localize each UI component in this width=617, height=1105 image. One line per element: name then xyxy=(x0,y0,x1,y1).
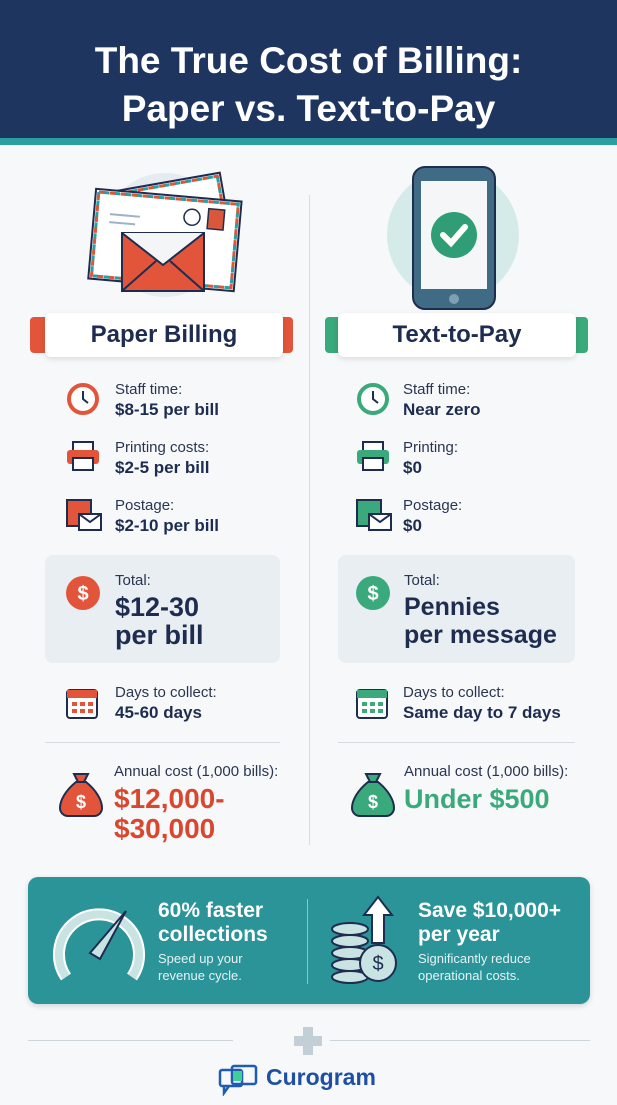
label: Text-to-Pay xyxy=(325,313,588,360)
title: The True Cost of Billing: xyxy=(95,40,522,81)
days right: Same day to 7 days xyxy=(403,703,561,722)
icon: money bag green xyxy=(351,773,395,817)
right rows: Printing: xyxy=(403,439,458,456)
logo: Curogram xyxy=(218,1064,376,1096)
icon: phone xyxy=(387,166,519,310)
icon: envelopes xyxy=(87,172,243,297)
text: save: operational costs. xyxy=(418,968,520,983)
header xyxy=(0,0,617,145)
days left xyxy=(66,684,217,722)
left rows: Printing costs: xyxy=(115,439,209,456)
total box right: Total: xyxy=(404,572,440,589)
label: Text-to-Pay: Text-to-Pay xyxy=(393,321,521,348)
annual left: $30,000 xyxy=(114,813,215,844)
icon: coins: $ xyxy=(372,953,384,975)
icon: dollar red: $ xyxy=(77,583,89,605)
left rows xyxy=(66,381,219,535)
total box left xyxy=(45,555,280,663)
icon: printer red xyxy=(67,441,99,471)
icon: speedometer xyxy=(52,908,146,980)
logo: Curogram: Curogram xyxy=(266,1064,376,1090)
left rows: $2-10 per bill xyxy=(115,516,219,535)
icon: coins xyxy=(331,896,397,984)
title xyxy=(95,40,522,129)
total box left: $12-30 xyxy=(115,592,199,622)
left rows: Staff time: xyxy=(115,381,182,398)
benefits banner xyxy=(28,877,590,1004)
annual left: $12,000- xyxy=(114,783,225,814)
icon: dollar green xyxy=(356,576,390,610)
text: save: Save $10,000+ xyxy=(418,899,561,922)
icon: dollar red xyxy=(66,576,100,610)
label: Paper Billing: Paper Billing xyxy=(91,321,237,348)
icon: postage red xyxy=(66,499,102,531)
total box right xyxy=(338,555,575,663)
right rows: $0 xyxy=(403,516,422,535)
annual right: Under $500 xyxy=(404,784,550,814)
icon: money bag red: $ xyxy=(76,792,86,812)
annual right xyxy=(351,763,568,817)
text: save: Significantly reduce xyxy=(418,951,531,966)
days left: Days to collect: xyxy=(115,684,217,701)
text: faster collections xyxy=(158,899,268,983)
icon: dollar green: $ xyxy=(367,583,379,605)
icon: money bag green: $ xyxy=(368,792,378,812)
total box left: Total: xyxy=(115,572,151,589)
right rows: Near zero xyxy=(403,400,480,419)
days right: Days to collect: xyxy=(403,684,505,701)
text: save xyxy=(418,899,561,983)
right rows: $0 xyxy=(403,458,422,477)
text: faster collections: revenue cycle. xyxy=(158,968,242,983)
icon: calendar green xyxy=(356,689,388,719)
title: Paper vs. Text-to-Pay xyxy=(122,88,495,129)
icon: medical cross xyxy=(294,1027,322,1055)
total box left: per bill xyxy=(115,620,204,650)
right rows: Postage: xyxy=(403,497,462,514)
icon: postage green xyxy=(356,499,392,531)
total box right: per message xyxy=(404,621,557,649)
icon: clock red xyxy=(67,383,99,415)
icon: calendar red xyxy=(66,689,98,719)
days right xyxy=(356,684,561,722)
label: Paper Billing xyxy=(30,313,293,360)
annual right: Annual cost (1,000 bills): xyxy=(404,763,568,780)
left rows: $2-5 per bill xyxy=(115,458,209,477)
text: save: per year xyxy=(418,923,500,946)
left rows: $8-15 per bill xyxy=(115,400,219,419)
text: faster collections: collections xyxy=(158,923,268,946)
annual left xyxy=(59,763,278,844)
right rows xyxy=(356,381,480,535)
text: faster collections: Speed up your xyxy=(158,951,243,966)
text: faster collections: 60% faster xyxy=(158,899,263,922)
left rows: Postage: xyxy=(115,497,174,514)
annual left: Annual cost (1,000 bills): xyxy=(114,763,278,780)
icon: printer green xyxy=(357,441,389,471)
icon: money bag red xyxy=(59,773,103,817)
right rows: Staff time: xyxy=(403,381,470,398)
days left: 45-60 days xyxy=(115,703,202,722)
icon: clock green xyxy=(357,383,389,415)
total box right: Pennies xyxy=(404,593,500,621)
column divider xyxy=(309,195,310,845)
